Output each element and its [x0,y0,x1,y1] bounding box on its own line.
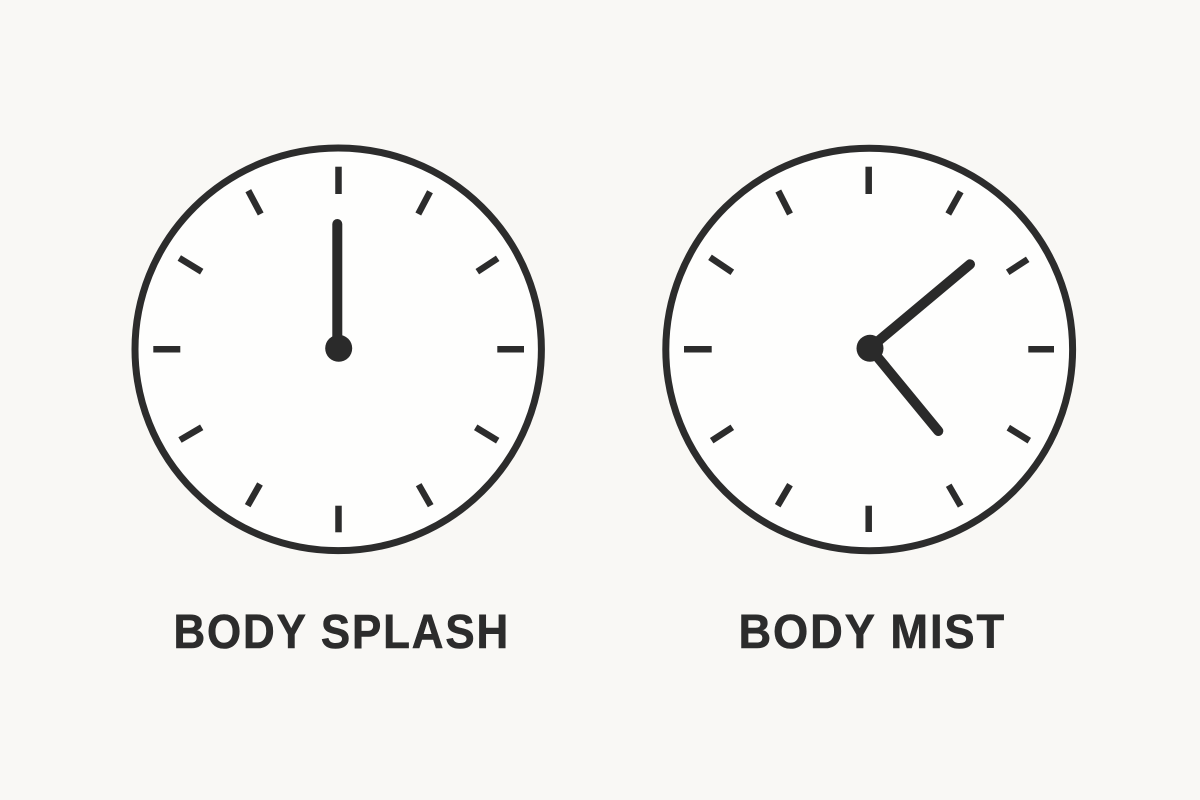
label: body mist: BODY MIST [738,606,1006,659]
center pin [325,335,352,362]
label: body splash: BODY SPLASH [174,606,510,659]
clock hands [870,264,970,431]
clock face [135,148,541,551]
clock: body splash [135,148,541,551]
hour ticks [153,167,524,532]
clock face [666,148,1073,551]
clock hand [332,224,342,349]
center pin [856,335,884,362]
clock: body mist [666,148,1073,551]
hour ticks [684,167,1054,532]
